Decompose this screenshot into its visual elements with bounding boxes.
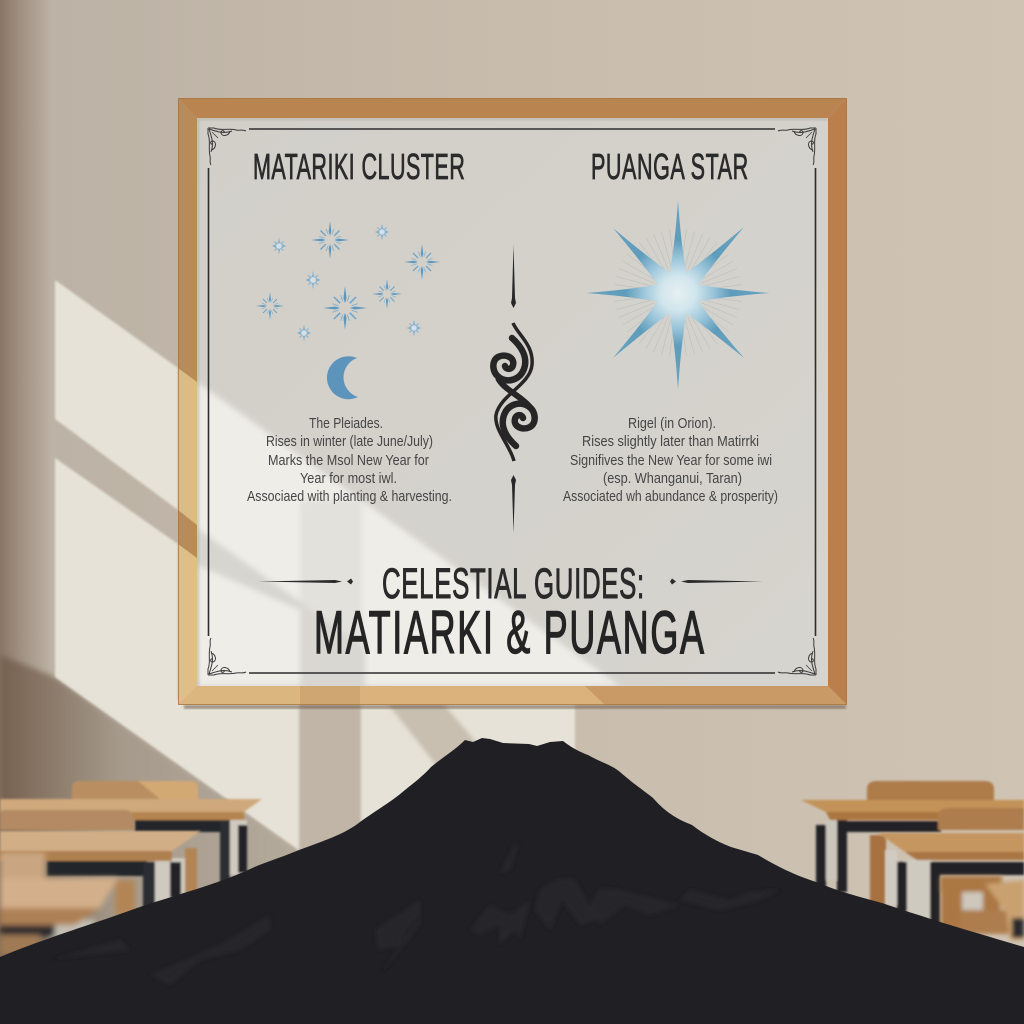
icon: Matariki star cluster xyxy=(256,221,440,342)
text block: Puanga facts: Rigel (in Orion). xyxy=(628,416,716,432)
corner ornament: top left xyxy=(208,128,246,165)
text block: Matariki facts xyxy=(247,416,452,505)
heading: Puanga star: PUANGA STAR xyxy=(591,147,748,187)
right desks xyxy=(801,781,1024,940)
corner ornament: bottom right xyxy=(778,638,816,675)
title ornament: right xyxy=(670,578,765,584)
heading: Matariki cluster: MATARIKI CLUSTER xyxy=(253,147,465,187)
text block: Puanga facts xyxy=(563,416,778,505)
left desks xyxy=(0,781,262,955)
text block: Matariki facts: Rises in winter (late June/July) xyxy=(266,434,433,450)
text block: Puanga facts: Signifives the New Year for some iwi xyxy=(570,453,772,469)
frame shadow xyxy=(184,705,846,709)
text block: Matariki facts: Marks the Msol New Year for xyxy=(268,453,429,469)
picture frame xyxy=(178,98,847,705)
corner ornament: bottom left xyxy=(208,638,246,675)
title ornament: left xyxy=(258,578,353,584)
text block: Puanga facts: Associated wh abundance & prosperity) xyxy=(563,489,778,505)
corner ornament: top right xyxy=(778,128,816,165)
mountain silhouette xyxy=(0,738,1024,1024)
text block: Matariki facts: The Pleiades. xyxy=(309,416,383,432)
icon: Puanga eight-point star xyxy=(586,200,770,390)
shadow bands on wall below frame xyxy=(300,700,476,860)
text block: Puanga facts: Rises slightly later than Matirrki xyxy=(582,434,759,450)
window light on wall xyxy=(55,280,575,860)
text block: Puanga facts: (esp. Whanganui, Taran) xyxy=(603,471,742,487)
title: MATIARKI & PUANGA xyxy=(314,600,704,666)
mountain ridge shading xyxy=(50,842,780,985)
title xyxy=(314,559,704,666)
title: CELESTIAL GUIDES: xyxy=(382,559,644,608)
text block: Matariki facts: Associaed with planting & harvesting. xyxy=(247,489,452,505)
poster paper xyxy=(197,118,828,686)
text block: Matariki facts: Year for most iwl. xyxy=(300,471,397,487)
central koru divider xyxy=(493,245,535,533)
icon: crescent moon xyxy=(327,356,358,399)
poster border lines xyxy=(208,129,816,673)
